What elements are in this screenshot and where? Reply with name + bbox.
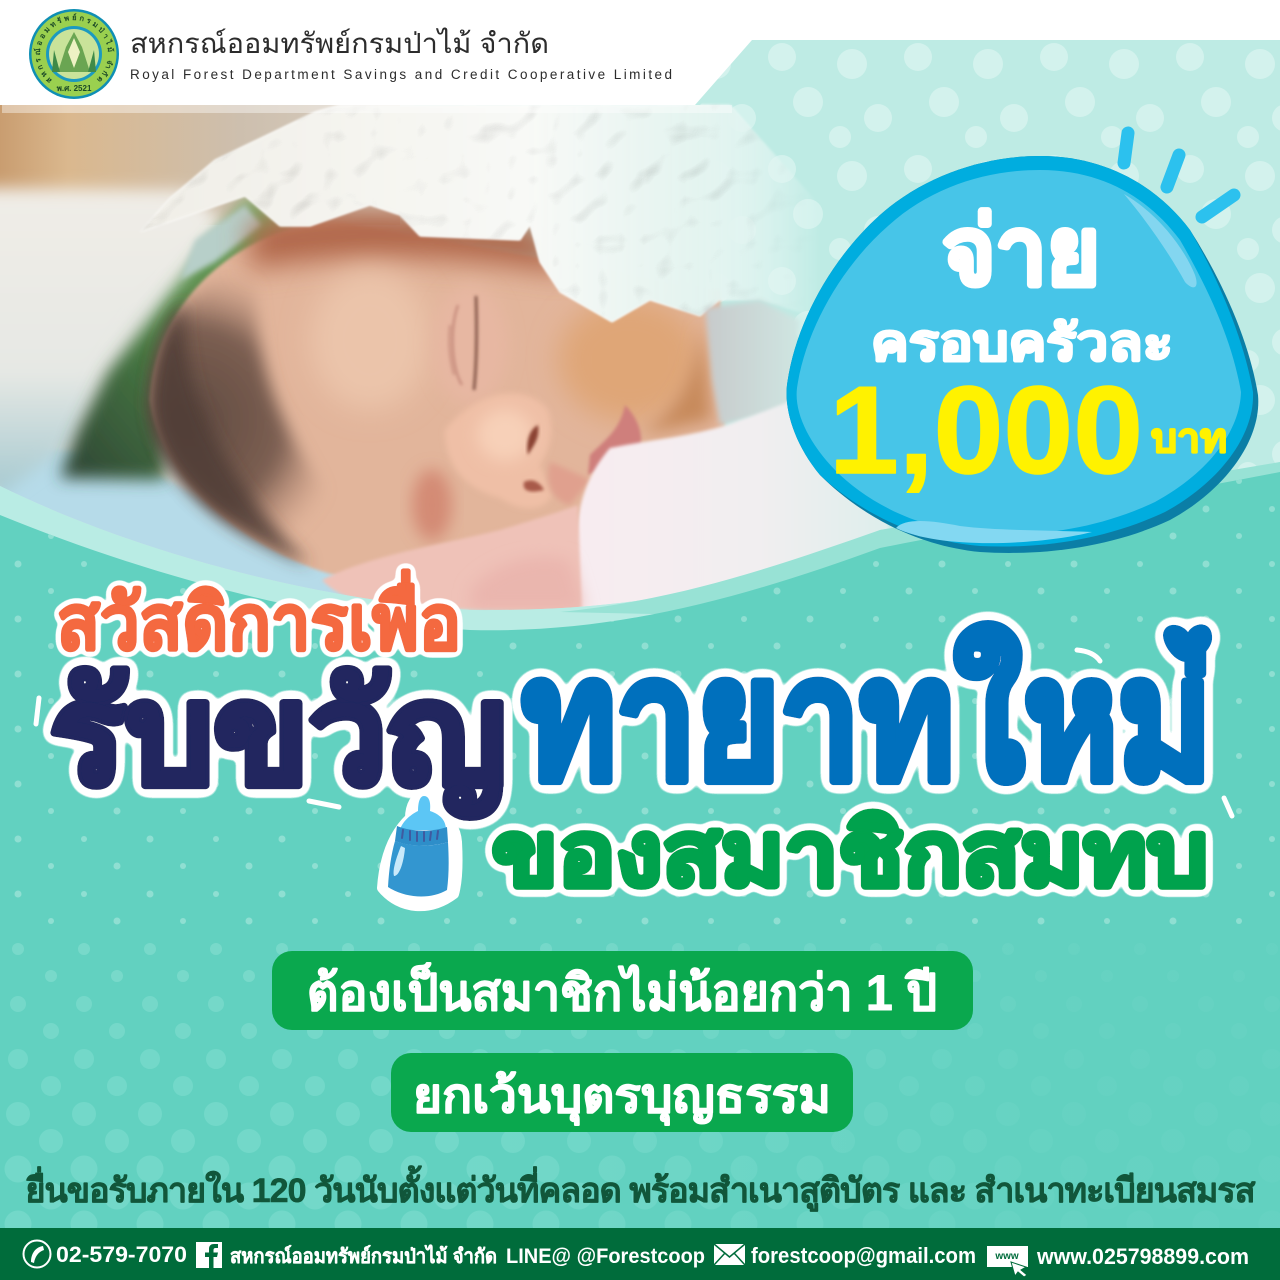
- top lightened strip: [2, 105, 732, 113]
- amount: 1,000: [829, 362, 1143, 500]
- main teal panel: [0, 472, 1280, 1280]
- headline line 3: of cooperative members: ของสมาชิกสมทบ: [492, 805, 1208, 905]
- closed eye: [449, 296, 477, 390]
- warm cheek: [558, 298, 702, 422]
- bubble body: [797, 170, 1241, 535]
- sparkle strokes: [1124, 133, 1234, 217]
- icon: www cursor: [987, 1246, 1028, 1277]
- condition pill: member at least 1 year: ต้องเป็นสมาชิกไม่น้อยกว่า 1 ปี: [307, 962, 937, 1021]
- small white accent marks: [36, 650, 1232, 816]
- payout bubble: [787, 133, 1258, 553]
- phone number: 02-579-7070: [56, 1242, 187, 1267]
- logo seal: พ.ศ. 2521: [57, 84, 92, 93]
- per family label: ครอบครัวละ: [871, 315, 1173, 371]
- baby hair: [144, 278, 318, 543]
- header band with logo and name: [0, 0, 1280, 105]
- grey cloth by the cheek: [705, 300, 800, 425]
- green blanket lining: [60, 195, 300, 480]
- dot rows growing downward: [0, 472, 1280, 1228]
- pay label: จ่าย: [942, 199, 1100, 304]
- bubble shadow rim: [787, 156, 1258, 553]
- line id: LINE@ @Forestcoop: [506, 1245, 705, 1268]
- dark blue words: รับขวัญ: [50, 656, 506, 818]
- bubble highlight: [1124, 194, 1197, 287]
- temple and eye socket highlight: [310, 270, 430, 410]
- lower teal panel with curved edge: [0, 462, 1280, 1280]
- icon: envelope: [714, 1244, 745, 1265]
- heart tone mark: [1163, 624, 1212, 662]
- logo seal: สหกรณ์ออมทรัพย์กรมป่าไม้ จำกัด: [34, 13, 114, 83]
- condition pill: except adopted children: [391, 1053, 853, 1132]
- header white shape: [0, 0, 1280, 105]
- baby bottle icon: [382, 794, 458, 906]
- baby head: [150, 222, 725, 585]
- bubble lower shine: [896, 521, 1092, 543]
- footer background: [0, 1228, 1280, 1280]
- tiny hand: [322, 505, 585, 612]
- photo underlay: [66, 264, 189, 490]
- Thai organisation name: สหกรณ์ออมทรัพย์กรมป่าไม้ จำกัด: [130, 28, 549, 59]
- lower sheet: [2, 450, 346, 595]
- mouth: [548, 405, 641, 505]
- pink garment: [577, 402, 890, 606]
- icon: phone: [24, 1240, 50, 1268]
- forehead shadow: [250, 210, 570, 275]
- headline line 1: welfare for: สวัสดิการเพื่อ: [57, 569, 461, 666]
- nose: [445, 393, 552, 508]
- icon: www cursor: www: [994, 1251, 1019, 1262]
- contact footer bar: [0, 1228, 1280, 1280]
- application note: ยื่นขอรับภายใน 120 วันนับตั้งแต่วันที่คลอด พร้อมสำเนาสูติบัตร และ สำเนาทะเบียนสมรส: [25, 1165, 1256, 1212]
- baby photograph: [0, 105, 900, 630]
- lower temple redness: [412, 469, 452, 541]
- baht unit: บาท: [1151, 417, 1227, 461]
- facebook name: สหกรณ์ออมทรัพย์กรมป่าไม้ จำกัด: [230, 1244, 497, 1268]
- light curved band: [0, 462, 1280, 640]
- furry blanket top: [140, 105, 825, 322]
- left blanket fold: [0, 188, 225, 495]
- photo backdrop: [0, 105, 400, 225]
- icon: facebook: [196, 1242, 222, 1268]
- email: forestcoop@gmail.com: [751, 1243, 976, 1268]
- English organisation name: Royal Forest Department Savings and Credit Cooperative Limited: [130, 67, 672, 82]
- headline line 2: welcome new heirs: [36, 624, 1232, 818]
- condition pill: member at least 1 year: [272, 951, 973, 1030]
- website: www.025798899.com: [1036, 1244, 1249, 1269]
- condition pill: except adopted children: ยกเว้นบุตรบุญธรรม: [413, 1070, 831, 1126]
- bubble outer rim: [787, 156, 1253, 547]
